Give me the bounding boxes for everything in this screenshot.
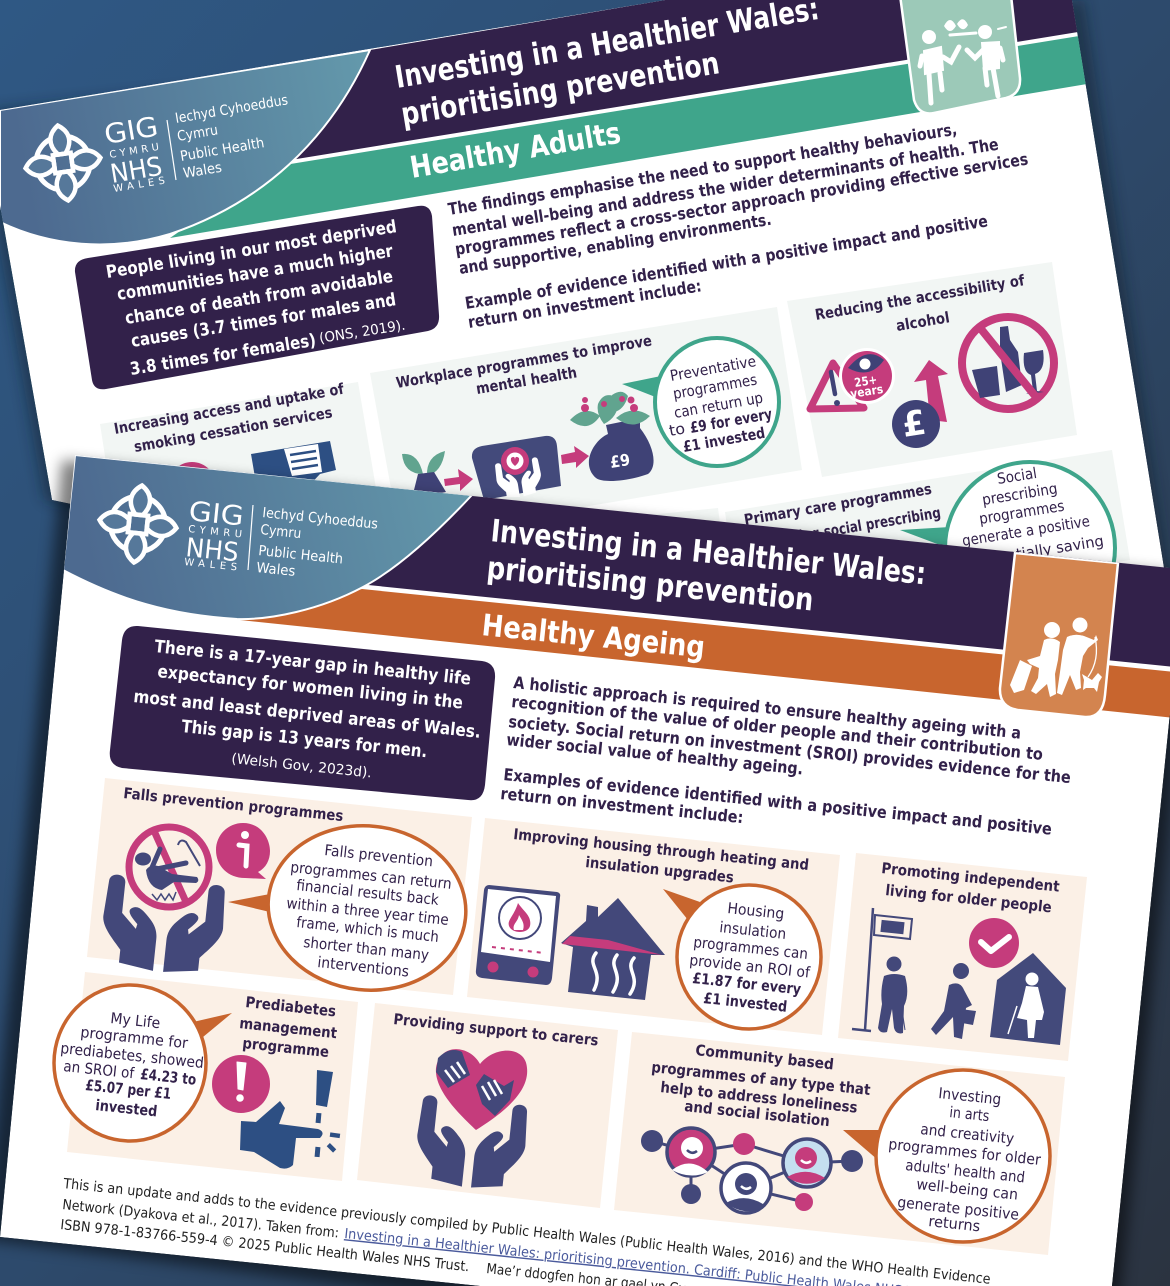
intro paragraph (500, 673, 1072, 839)
logo: NHS Wales (20, 92, 289, 206)
callout: deprived communities: causes (3.7 times for males and (130, 290, 397, 352)
panel: smoking cessation (100, 382, 376, 486)
bubble: falls prevention: financial results back (296, 876, 440, 909)
icon: finger prick (240, 1070, 340, 1169)
bubble: arts and creativity: Investing (938, 1084, 1002, 1109)
intro paragraph: wider social value of healthy ageing. (506, 730, 804, 779)
icon: warning triangle (810, 363, 864, 409)
bubble: arts and creativity: in arts (949, 1103, 990, 1125)
panel: reducing alcohol accessibility (787, 262, 1077, 477)
title: prioritising prevention (398, 45, 722, 133)
intro paragraph: return on investment include: (500, 784, 744, 827)
panel: reducing alcohol accessibility: alcohol (895, 308, 951, 335)
bubble: housing insulation (663, 885, 821, 1029)
bubble: My Life prediabetes (54, 985, 232, 1141)
bubble: housing insulation: insulation (719, 918, 787, 943)
bubble: preventative programmes: Preventative (669, 352, 757, 385)
bubble: social prescribing: generate a positive (961, 512, 1091, 550)
bubble: My Life prediabetes: My Life (110, 1009, 161, 1032)
paper (0, 455, 1170, 1286)
logo: NHS Wales: Public Health (258, 543, 344, 568)
front sheet: Healthy Ageing (0, 455, 1170, 1286)
logo: NHS Wales: GIG (102, 111, 160, 151)
callout: healthy life gap: expectancy for women living in the (156, 662, 464, 714)
panel: independent living: Promoting independent (881, 859, 1060, 896)
icon: pink circle and chat (179, 441, 336, 480)
badge: healthy ageing (1000, 553, 1118, 717)
panel: prediabetes: management (239, 1014, 338, 1042)
callout: healthy life gap: (Welsh Gov, 2023d). (231, 751, 372, 781)
panel: social prescribing: promoting social prescribing (750, 504, 942, 553)
callout: deprived communities (75, 206, 439, 389)
logo: NHS Wales: NHS (184, 533, 240, 568)
bubble: arts and creativity: generate positive (897, 1193, 1020, 1224)
logo: NHS Wales: CYMRU (188, 524, 243, 540)
arrow up (914, 360, 948, 422)
bubble: arts and creativity (843, 1070, 1050, 1242)
badge: healthy adults (900, 0, 1020, 113)
bubble: social prescribing: prescribing (981, 479, 1059, 509)
title: Investing in a Healthier Wales: (489, 513, 928, 592)
icon: money bag: £9 (609, 450, 631, 472)
logo panel curve (0, 50, 370, 244)
arrow (444, 469, 473, 491)
panel: social prescribing (725, 450, 1130, 562)
bubble: arts and creativity: programmes for older (888, 1135, 1042, 1169)
bubble: social prescribing: Social (996, 464, 1038, 488)
green band (170, 36, 1087, 238)
bubble: falls prevention: within a three year time (286, 894, 450, 929)
panel: workplace mental health: mental health (475, 363, 578, 398)
logo: NHS Wales: GIG (187, 496, 245, 533)
callout: deprived communities: chance of death from avoidable (124, 267, 395, 329)
icon: insulated house (561, 898, 665, 1000)
bubble: housing insulation: programmes can (693, 933, 809, 963)
footer text: Network (Dyakova et al., 2017). Taken from: (62, 1197, 340, 1242)
heading: Healthy Adults: Healthy Adults (407, 116, 623, 186)
panel: prediabetes: programme (242, 1034, 330, 1061)
callout: deprived communities: 3.8 times for females) (129, 331, 317, 380)
intro paragraph: and supportive, enabling environments. (458, 210, 773, 278)
panel: social prescribing: Primary care programmes (743, 480, 933, 529)
intro paragraph: Examples of evidence identified with a positive impact and positive (503, 765, 1053, 839)
callout: deprived communities: communities have a much higher (116, 241, 395, 305)
back sheet: Healthy Adults (0, 0, 1164, 568)
intro paragraph: return on investment include: (467, 276, 703, 332)
logo: NHS Wales: WALES (113, 176, 166, 195)
panel: independent living: living for older people (885, 881, 1053, 916)
intro paragraph: programmes reflect a cross-sector approach providing effective services (454, 149, 1030, 259)
bubble: arts and creativity: returns (928, 1212, 981, 1235)
callout: healthy life gap (110, 626, 495, 800)
callout: healthy life gap: most and least deprived areas of Wales. (132, 687, 482, 743)
paper (0, 0, 1164, 568)
panel: housing upgrades (467, 818, 840, 1035)
intro paragraph (447, 120, 1030, 332)
panel: community programmes: programmes of any type that (651, 1058, 871, 1099)
intro paragraph: recognition of the value of older people and their contribution to (511, 692, 1044, 764)
logo: NHS Wales: Wales (256, 560, 296, 580)
bubble: falls prevention (228, 816, 474, 1000)
logo: NHS Wales: Cymru (260, 522, 302, 542)
intro paragraph: Example of evidence identified with a positive impact and positive (464, 211, 989, 313)
icon: no alcohol (962, 317, 1054, 409)
bubble: preventative programmes: £1 invested (682, 424, 766, 456)
panel: independent living (838, 853, 1087, 1061)
panel: community programmes: help to address loneliness (660, 1078, 858, 1117)
bubble: falls prevention: shorter than many (303, 933, 430, 964)
icon: person with shopping basket (931, 963, 976, 1039)
bubble: My Life prediabetes: an SROI of (63, 1057, 136, 1082)
icon: tick (969, 918, 1019, 968)
icon: heart and hands (412, 1049, 530, 1193)
intro paragraph: mental well-being and address the wider determinants of health. The (451, 135, 1000, 240)
callout: healthy life gap: There is a 17-year gap in healthy life (153, 637, 472, 690)
panel: prediabetes: Prediabetes (245, 993, 337, 1020)
back sheet shadow (0, 0, 1170, 700)
icon: boiler (476, 885, 560, 985)
callout: deprived communities: People living in our most deprived (105, 217, 398, 283)
icon: 25+ years: 25+ (853, 373, 878, 390)
panel: smoking cessation: Increasing access and uptake of (113, 380, 346, 438)
purple title band (368, 495, 1170, 667)
panel: prediabetes (54, 972, 358, 1181)
bubble: falls prevention: frame, which is much (296, 913, 440, 946)
bubble: housing insulation: £1.87 for every (692, 969, 802, 998)
footer text: ISBN 978-1-83766-559-4 © 2025 Public Health Wales NHS Trust. (60, 1217, 470, 1275)
icon: pound coin: £ (899, 403, 929, 446)
icon: bus stop (852, 908, 912, 1031)
icon: money bag (570, 392, 654, 481)
panel: housing upgrades: insulation upgrades (585, 853, 735, 887)
bubble: My Life prediabetes: programme for (80, 1023, 190, 1052)
icon: pound coin (892, 400, 940, 448)
icon: woman at home (990, 953, 1066, 1045)
orange band (240, 589, 1170, 718)
bubble: preventative programmes (622, 338, 779, 466)
bubble: preventative programmes: can return up (673, 389, 764, 422)
title (392, 0, 822, 133)
icon: person with cane (878, 956, 907, 1033)
bubble: social prescribing: programmes (978, 497, 1066, 528)
bubble: preventative programmes: £9 for every (689, 405, 774, 437)
bubble: My Life prediabetes: £5.07 per £1 (85, 1076, 172, 1103)
bubble: arts and creativity: adults' health and (905, 1156, 1026, 1187)
bubble: My Life prediabetes: £4.23 to (140, 1065, 197, 1089)
panel: support to carers: Providing support to carers (393, 1010, 599, 1050)
logo: NHS Wales: NHS (108, 152, 164, 190)
bubble: preventative programmes: to (668, 419, 686, 440)
panel: community programmes: Community based (695, 1041, 835, 1074)
callout: healthy life gap: This gap is 13 years for men. (180, 717, 428, 762)
bubble: falls prevention: interventions (317, 953, 410, 981)
bubble: falls prevention: programmes can return (290, 858, 453, 893)
logo: NHS Wales: Public Health (179, 135, 265, 165)
logo: NHS Wales: Cymru (176, 122, 219, 145)
icon: no falls in hands (98, 827, 227, 978)
callout: deprived communities: (ONS, 2019). (318, 318, 407, 347)
panel: smoking cessation: smoking cessation services (133, 403, 334, 456)
intro paragraph: society. Social return on investment (SROI) provides evidence for the (508, 712, 1072, 787)
icon: wellbeing hands (472, 436, 561, 500)
icon: social network (641, 1128, 863, 1213)
bubble: arts and creativity: well-being can (916, 1175, 1019, 1204)
icon: exclamation circle (212, 1055, 270, 1113)
bubble: social prescribing (946, 460, 1117, 562)
panel: falls prevention: Falls prevention programmes (123, 784, 344, 825)
logo: NHS Wales: Iechyd Cyhoeddus (262, 505, 379, 533)
panel: support to carers (357, 1003, 618, 1208)
icon: information bubble (216, 823, 270, 879)
bubble: housing insulation: £1 invested (703, 989, 788, 1016)
logo: NHS Wales (96, 482, 379, 580)
arrow (561, 446, 589, 468)
title: prioritising prevention (485, 550, 815, 619)
logo: NHS Wales: WALES (184, 557, 238, 573)
bubble: preventative programmes: programmes (672, 370, 759, 403)
panel: community programmes (614, 1032, 1065, 1255)
logo: NHS Wales: Iechyd Cyhoeddus (174, 92, 289, 127)
panel: reducing alcohol accessibility: Reducing the accessibility of (814, 271, 1026, 324)
bubble: social prescribing: potentially saving (973, 532, 1105, 570)
bubble: My Life prediabetes: invested (95, 1096, 158, 1120)
panel: community programmes: and social isolation (684, 1097, 831, 1130)
logo: NHS Wales: CYMRU (109, 142, 160, 161)
icon: 25+ years (839, 348, 895, 404)
logo: NHS Wales: Wales (182, 160, 223, 182)
panel: small lower left (656, 508, 720, 522)
logo panel curve (63, 455, 472, 619)
icon: seedling bag (402, 451, 446, 493)
heading: Healthy Ageing: Healthy Ageing (480, 608, 707, 666)
bubble: arts and creativity: and creativity (920, 1120, 1015, 1148)
intro paragraph: A holistic approach is required to ensure healthy ageing with a (513, 673, 1022, 743)
panel: falls prevention (87, 778, 474, 1000)
panel: housing upgrades: Improving housing through heating and (513, 825, 810, 874)
panel: workplace mental health: Workplace programmes to improve (395, 331, 653, 392)
bubble: My Life prediabetes: prediabetes, showed (60, 1039, 205, 1072)
front sheet shadow (0, 460, 1170, 1286)
bubble: housing insulation: Housing (727, 899, 785, 923)
panel: workplace mental health (370, 307, 802, 507)
bubble: falls prevention: Falls prevention (324, 841, 434, 870)
bubble: housing insulation: provide an ROI of (689, 951, 811, 982)
intro paragraph: The findings emphasise the need to support healthy behaviours, (447, 120, 958, 219)
icon: 25+ years: years (849, 382, 884, 401)
purple title band (272, 0, 1078, 163)
